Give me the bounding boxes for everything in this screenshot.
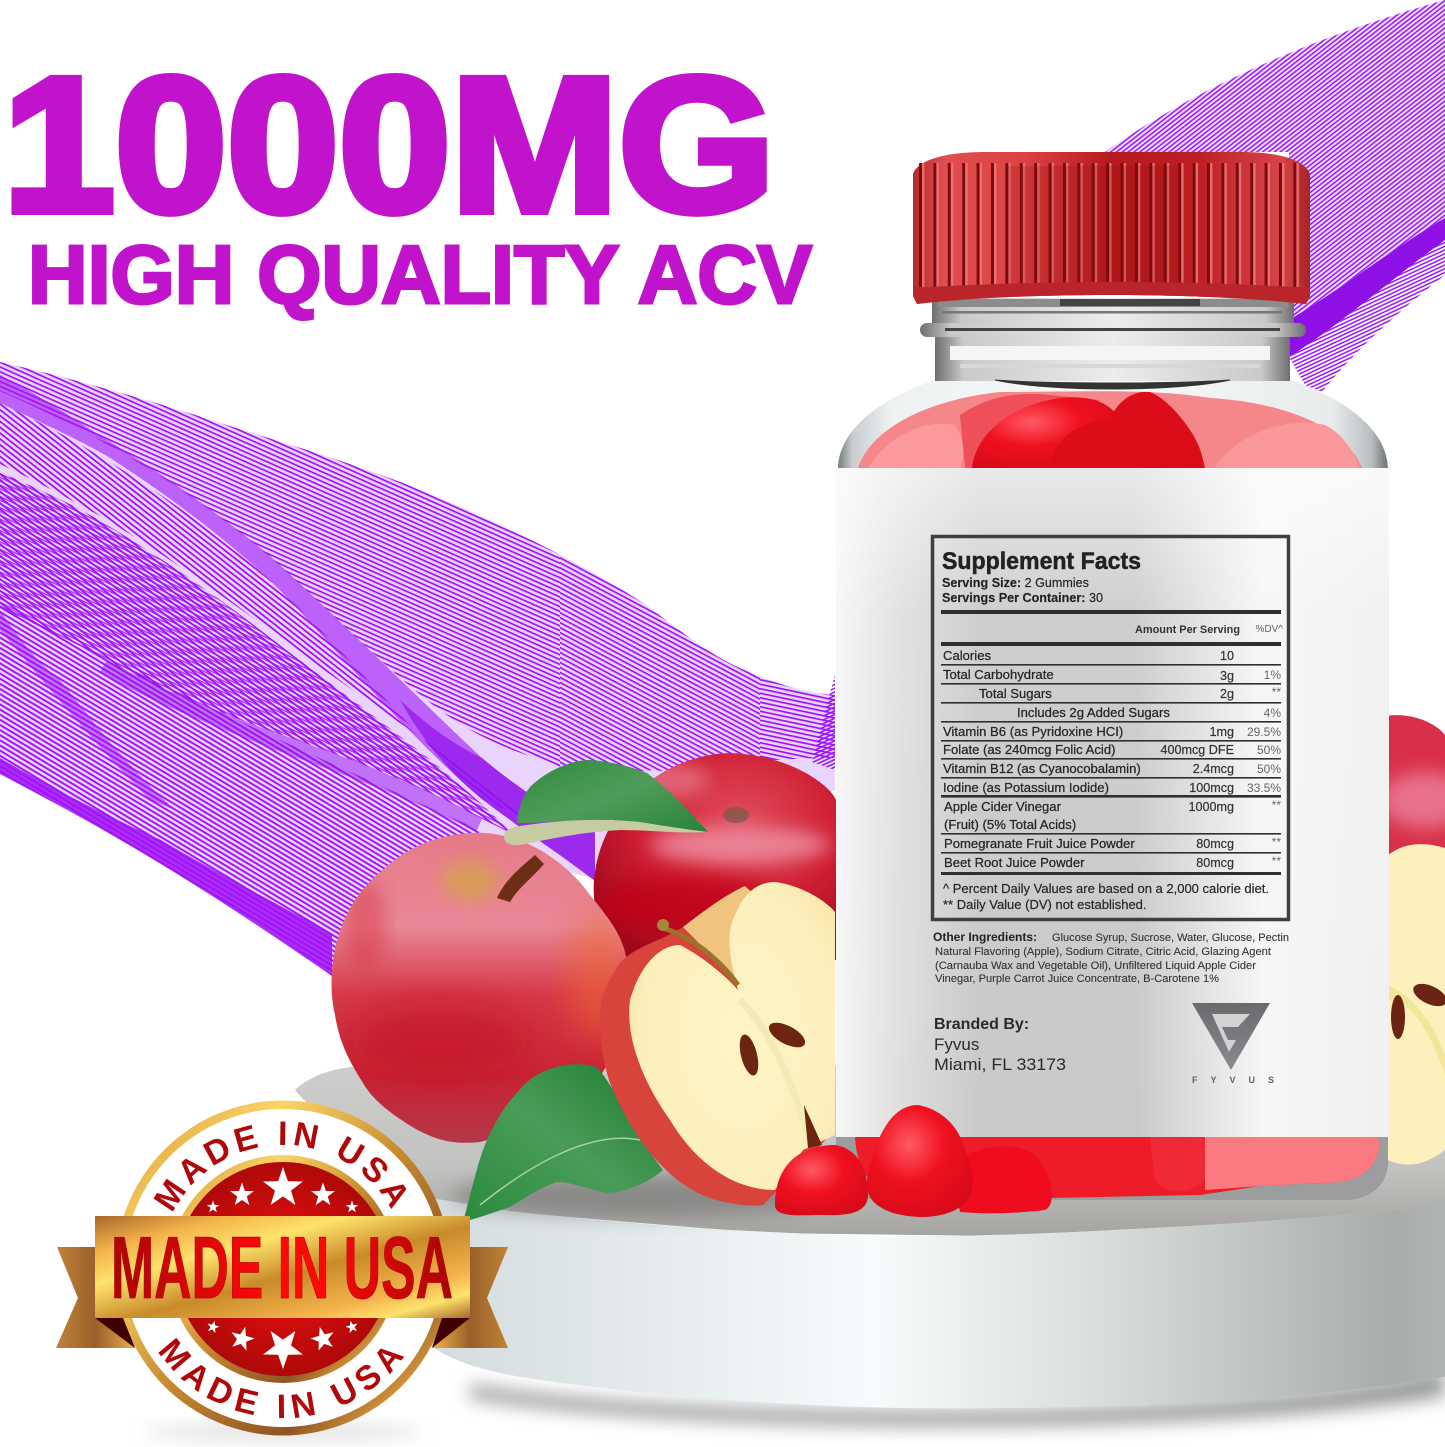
nutrition rows: Pomegranate Fruit Juice Powder — [944, 836, 1135, 851]
footnotes: ** Daily Value (DV) not established. — [943, 897, 1147, 912]
seal red centre — [176, 1162, 390, 1376]
nutrition rows: 80mcg — [1196, 856, 1234, 870]
other ingredients: (Carnauba Wax and Vegetable Oil), Unfiltered Liquid Apple Cider — [935, 960, 1256, 972]
bottle — [836, 298, 1388, 1200]
nutrition rows: 4% — [1264, 706, 1281, 720]
nutrition rows: ** — [1272, 835, 1281, 849]
nutrition rows: 100mcg — [1189, 781, 1234, 795]
ribbon text: MADE IN USA — [111, 1218, 453, 1317]
apple core — [740, 1000, 810, 1140]
other ingredients: Vinegar, Purple Carrot Juice Concentrate, B-Carotene 1% — [935, 973, 1220, 985]
ribbon tail left — [56, 1247, 135, 1348]
nutrition rows: Calories — [943, 648, 991, 663]
footnotes — [943, 881, 1269, 912]
table header: %DV^ — [1256, 624, 1283, 635]
seal gold inner — [169, 1155, 397, 1383]
nutrition rows — [943, 648, 1281, 870]
table header — [1135, 624, 1283, 636]
nutrition rows: Vitamin B12 (as Cyanocobalamin) — [943, 761, 1141, 776]
nutrition rows: 50% — [1257, 743, 1281, 757]
apple flesh — [629, 882, 835, 1190]
purple wave: right — [1105, 0, 1445, 392]
other ingredients — [933, 930, 1289, 985]
nutrition rows: Apple Cider Vinegar — [944, 799, 1062, 814]
label — [836, 468, 1389, 1137]
nutrition rows: (Fruit) (5% Total Acids) — [944, 817, 1076, 832]
stars bottom — [206, 1319, 359, 1369]
badge: made in USA — [56, 1100, 508, 1446]
nutrition rows: 1% — [1264, 668, 1281, 682]
apple skin — [600, 888, 835, 1206]
nutrition rows: 1000mg — [1188, 800, 1234, 814]
nutrition rows: 50% — [1257, 762, 1281, 776]
leaf: upper — [504, 760, 708, 845]
podium — [295, 1066, 1445, 1426]
subtitle: high quality ACV: HIGH QUALITY ACV — [28, 228, 812, 321]
other ingredients: Natural Flavoring (Apple), Sodium Citrate, Citric Acid, Glazing Agent — [935, 946, 1271, 958]
apple seeds — [736, 1018, 822, 1148]
bottle base glass — [836, 1137, 1388, 1200]
nutrition rows: 80mcg — [1196, 837, 1234, 851]
nutrition rows: Total Carbohydrate — [943, 667, 1054, 682]
seal white ring — [124, 1109, 442, 1427]
neck rings — [920, 298, 1306, 389]
gummies top — [858, 391, 1362, 468]
apple: back — [594, 753, 836, 960]
panel: supplement facts — [932, 536, 1288, 920]
purple wave: left — [0, 362, 835, 976]
nutrition rows: Beet Root Juice Powder — [944, 855, 1085, 870]
logo: FYVUS: FYVUS — [1192, 1075, 1274, 1085]
logo: FYVUS — [1192, 1003, 1274, 1085]
ribbon band — [95, 1216, 470, 1318]
nutrition rows: 10 — [1220, 649, 1234, 663]
nutrition rows: Iodine (as Potassium Iodide) — [943, 780, 1109, 795]
badge shadow — [143, 1425, 423, 1439]
bottle glass body — [836, 335, 1388, 1200]
nutrition rows: Vitamin B6 (as Pyridoxine HCI) — [943, 724, 1123, 739]
title: 1000MG: 1000MG — [3, 37, 775, 252]
seal ring — [116, 1100, 450, 1436]
other ingredients: Other Ingredients: — [933, 930, 1037, 944]
nutrition rows: ** — [1272, 685, 1281, 699]
apple stem — [657, 919, 738, 985]
apple behind bottle at right — [1380, 715, 1445, 1165]
branded by: Miami, FL 33173 — [934, 1055, 1066, 1074]
nutrition rows: Folate (as 240mcg Folic Acid) — [943, 742, 1115, 757]
nutrition rows: 29.5% — [1247, 725, 1281, 739]
serving info: Serving Size: 2 Gummies — [942, 576, 1089, 590]
ribbon tail right — [432, 1247, 508, 1348]
nutrition rows: Includes 2g Added Sugars — [1017, 705, 1170, 720]
arc text top: MADE IN USA — [154, 1122, 406, 1212]
nutrition rows: 2g — [1220, 687, 1234, 701]
serving info — [942, 576, 1103, 605]
nutrition rows: ** — [1272, 854, 1281, 868]
other ingredients: Glucose Syrup, Sucrose, Water, Glucose, Pectin — [1052, 932, 1289, 944]
gummies bottom — [855, 1137, 1380, 1198]
apple: large front — [332, 833, 630, 1143]
heading: supplement facts: Supplement Facts — [942, 548, 1141, 575]
ribbon folds — [95, 1318, 470, 1348]
branded by: Fyvus — [934, 1035, 979, 1054]
gummies: front group — [775, 1105, 1052, 1217]
nutrition rows: 2.4mcg — [1193, 762, 1234, 776]
leaf: lower — [463, 1064, 663, 1222]
nutrition rows: ** — [1272, 798, 1281, 812]
footnotes: ^ Percent Daily Values are based on a 2,000 calorie diet. — [943, 881, 1269, 896]
podium side — [425, 1197, 1445, 1408]
branded by — [934, 1016, 1066, 1074]
arc text bottom: MADE IN USA — [158, 1338, 404, 1418]
nutrition rows: 3g — [1220, 669, 1234, 683]
nutrition rows: 400mcg DFE — [1160, 743, 1234, 757]
stars top — [207, 1167, 358, 1212]
apple: cut half — [600, 882, 835, 1206]
table header: Amount Per Serving — [1135, 624, 1240, 636]
bottle cap — [913, 152, 1310, 304]
apple shadow on podium — [450, 1173, 830, 1217]
nutrition rows: 1mg — [1210, 725, 1234, 739]
apple back wedge — [683, 886, 760, 990]
apple stem — [497, 855, 544, 902]
nutrition rows: 33.5% — [1247, 781, 1281, 795]
branded by: Branded By: — [934, 1016, 1029, 1033]
podium shadow — [470, 1370, 1445, 1426]
nutrition rows: Total Sugars — [979, 686, 1052, 701]
serving info: Servings Per Container: 30 — [942, 591, 1103, 605]
